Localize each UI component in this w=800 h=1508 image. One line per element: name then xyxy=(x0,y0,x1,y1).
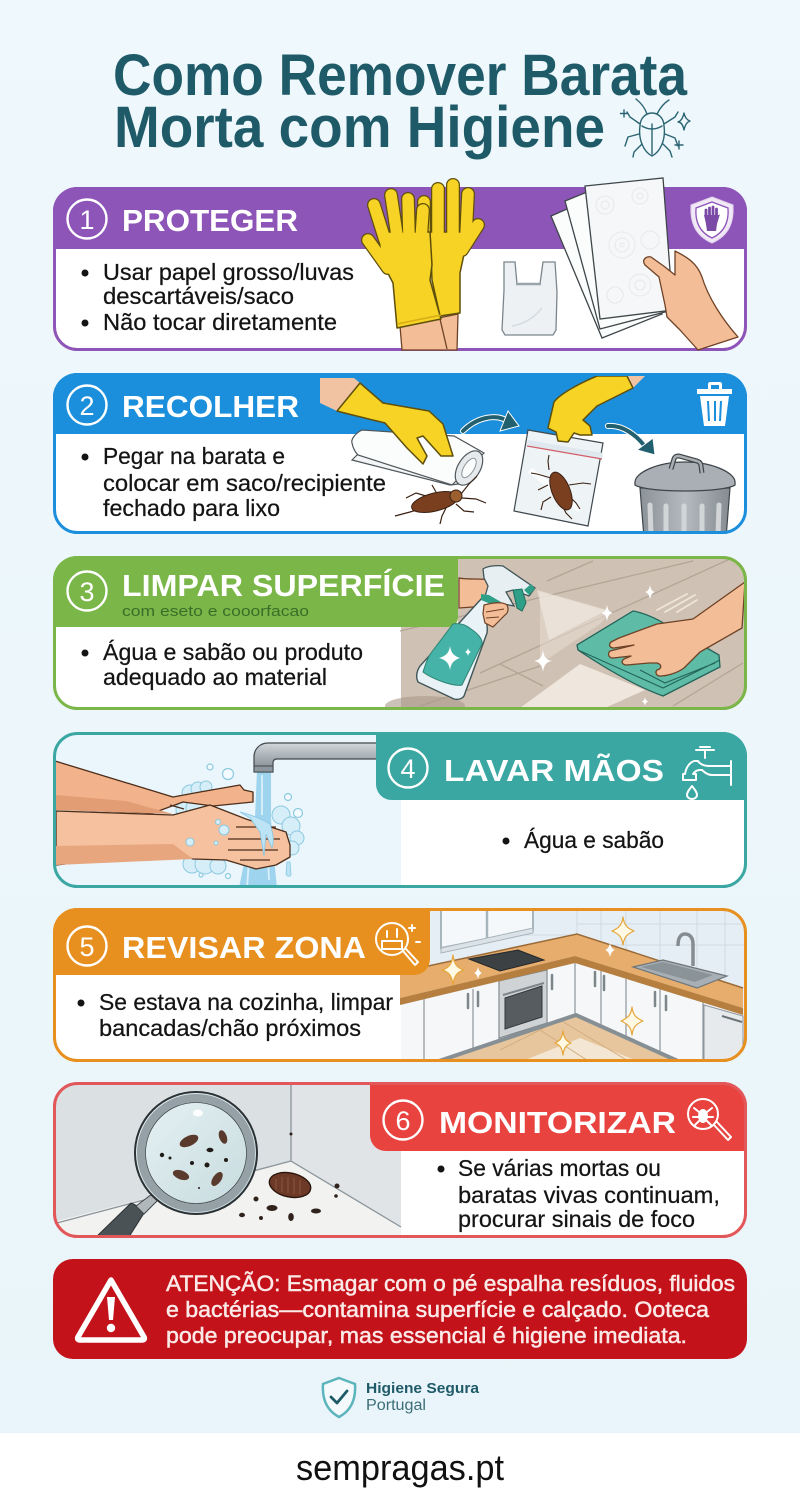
header band: limpar superficie xyxy=(53,556,458,627)
subheading: com eseto e cooorfacao xyxy=(122,603,309,620)
panel: 6 monitorizar xyxy=(53,1082,747,1240)
heading: revisar zona: REVISAR ZONA xyxy=(122,931,366,965)
heading: monitorizar: MONITORIZAR xyxy=(439,1106,676,1140)
bullet list: recolher xyxy=(82,443,386,521)
bullet list: monitorizar: Se várias mortas ou xyxy=(458,1155,661,1181)
header band: monitorizar xyxy=(370,1082,747,1151)
heading: recolher: RECOLHER xyxy=(122,390,299,424)
number badge 6 xyxy=(384,1100,422,1140)
logo: higiene segura portugal: Higiene Segura xyxy=(366,1380,480,1397)
warning text: pode preocupar, mas essencial é higiene imediata. xyxy=(166,1323,687,1348)
border xyxy=(54,188,746,350)
title: Como Remover Barata xyxy=(113,43,688,108)
icon: magnifier with bug xyxy=(688,1099,731,1140)
illustration: yellow gloves xyxy=(368,185,478,350)
border xyxy=(54,1084,746,1236)
number badge 4 xyxy=(388,748,428,788)
illustration: magnifying glass xyxy=(93,1092,257,1240)
title xyxy=(113,43,688,160)
panel: 3 limpar superficie xyxy=(53,553,747,716)
number badge 2 xyxy=(68,386,106,424)
illustration: trash can xyxy=(635,456,735,538)
bullet list: proteger: descartáveis/saco xyxy=(103,283,294,309)
warning text xyxy=(166,1271,735,1348)
icon: trash bin xyxy=(697,382,732,426)
bullet list: proteger: Usar papel grosso/luvas xyxy=(103,259,354,285)
icon: shield with hand xyxy=(691,197,733,243)
illustration: kitchen xyxy=(400,908,747,1062)
bullet list: monitorizar: baratas vivas continuam, xyxy=(458,1182,720,1208)
logo: higiene segura portugal xyxy=(323,1378,480,1417)
border xyxy=(54,910,746,1060)
bullet list: limpar superficie: Água e sabão ou produto xyxy=(103,639,363,665)
illustration: paper towels and hand xyxy=(551,178,738,350)
icon: magnifier over kitchen xyxy=(376,923,420,965)
bullet list: recolher: colocar em saco/recipiente xyxy=(103,470,386,496)
illustration: hands with foam xyxy=(55,761,304,876)
header band: proteger xyxy=(53,187,747,249)
bullet list: monitorizar xyxy=(438,1155,720,1232)
illustration: ootheca xyxy=(267,1169,313,1201)
panel: 4 lavar maos xyxy=(53,732,747,888)
bullet list: lavar maos: Água e sabão xyxy=(524,827,664,853)
sparkles: kitchen xyxy=(442,917,643,1055)
heading: lavar maos: LAVAR MÃOS xyxy=(444,753,664,788)
heading: proteger: PROTEGER xyxy=(122,204,298,238)
panel: 1 proteger xyxy=(53,178,747,351)
illustration: hand wiping with teal cloth xyxy=(577,582,745,696)
panel: warning xyxy=(53,1259,747,1359)
bullet list: proteger xyxy=(82,259,354,335)
number badge 6: 6 xyxy=(395,1106,411,1136)
title: Morta com Higiene xyxy=(114,95,605,160)
panel: 5 revisar zona xyxy=(53,908,747,1062)
footer bar xyxy=(0,1433,800,1508)
illustration: zip bag with cockroach xyxy=(514,430,603,526)
number badge 1: 1 xyxy=(79,205,95,235)
warning text: ATENÇÃO: Esmagar com o pé espalha resíduos, fluidos xyxy=(166,1271,735,1296)
icon: cockroach with sparkles xyxy=(620,99,690,157)
icon: faucet xyxy=(683,747,731,799)
illustration: spray mist xyxy=(537,590,607,640)
number badge 4: 4 xyxy=(400,754,416,784)
illustration: gloved hand with paper roll xyxy=(320,378,488,490)
icon: warning triangle xyxy=(78,1280,144,1340)
logo: higiene segura portugal: Portugal xyxy=(366,1397,426,1414)
bullet list: recolher: fechado para lixo xyxy=(103,495,280,521)
bullet list: monitorizar: procurar sinais de foco xyxy=(458,1206,695,1232)
foam bubbles xyxy=(199,764,302,878)
warning text: e bactérias—contamina superfície e calçado. Ooteca xyxy=(166,1297,709,1322)
arrow: curved to trash xyxy=(608,426,655,455)
bullet list: limpar superficie: adequado ao material xyxy=(103,664,327,690)
heading: limpar superficie: LIMPAR SUPERFÍCIE xyxy=(122,568,445,603)
number badge 2: 2 xyxy=(79,391,95,421)
illustration: floor photo xyxy=(385,553,747,716)
illustration: faucet xyxy=(254,743,378,772)
number badge 5: 5 xyxy=(79,932,95,962)
bullet list: proteger: Não tocar diretamente xyxy=(103,309,337,335)
panel: 2 recolher xyxy=(53,373,747,538)
bullet list: revisar zona xyxy=(78,989,393,1041)
border xyxy=(54,374,746,532)
sparkles: white glints xyxy=(474,943,615,979)
bullet list: recolher: Pegar na barata e xyxy=(103,443,285,469)
bullet list: revisar zona: bancadas/chão próximos xyxy=(99,1015,361,1041)
illustration: plastic bag xyxy=(502,262,557,335)
number badge 3 xyxy=(68,572,106,610)
border xyxy=(54,558,746,708)
illustration: cockroach on floor xyxy=(395,476,486,524)
number badge 5 xyxy=(68,926,106,966)
number badge 3: 3 xyxy=(79,577,95,607)
header band: revisar zona xyxy=(53,908,430,975)
number badge 1 xyxy=(68,200,106,238)
border xyxy=(54,734,746,886)
illustration: water stream xyxy=(239,770,277,888)
header band: recolher xyxy=(53,373,747,434)
arrow: curved to bag xyxy=(463,411,519,431)
bullet list: revisar zona: Se estava na cozinha, limpar xyxy=(99,989,393,1015)
illustration: washing background xyxy=(53,732,401,888)
footer text: sempragas.pt xyxy=(296,1447,504,1488)
sparkles xyxy=(534,585,655,706)
illustration: spray bottle with hand xyxy=(417,566,535,699)
illustration: droppings on floor xyxy=(239,1132,340,1221)
header band: lavar maos xyxy=(376,732,747,800)
bullet list: limpar superficie xyxy=(82,639,363,690)
illustration: gloved hand holding bag xyxy=(548,376,645,442)
illustration: room corner xyxy=(53,1082,401,1238)
